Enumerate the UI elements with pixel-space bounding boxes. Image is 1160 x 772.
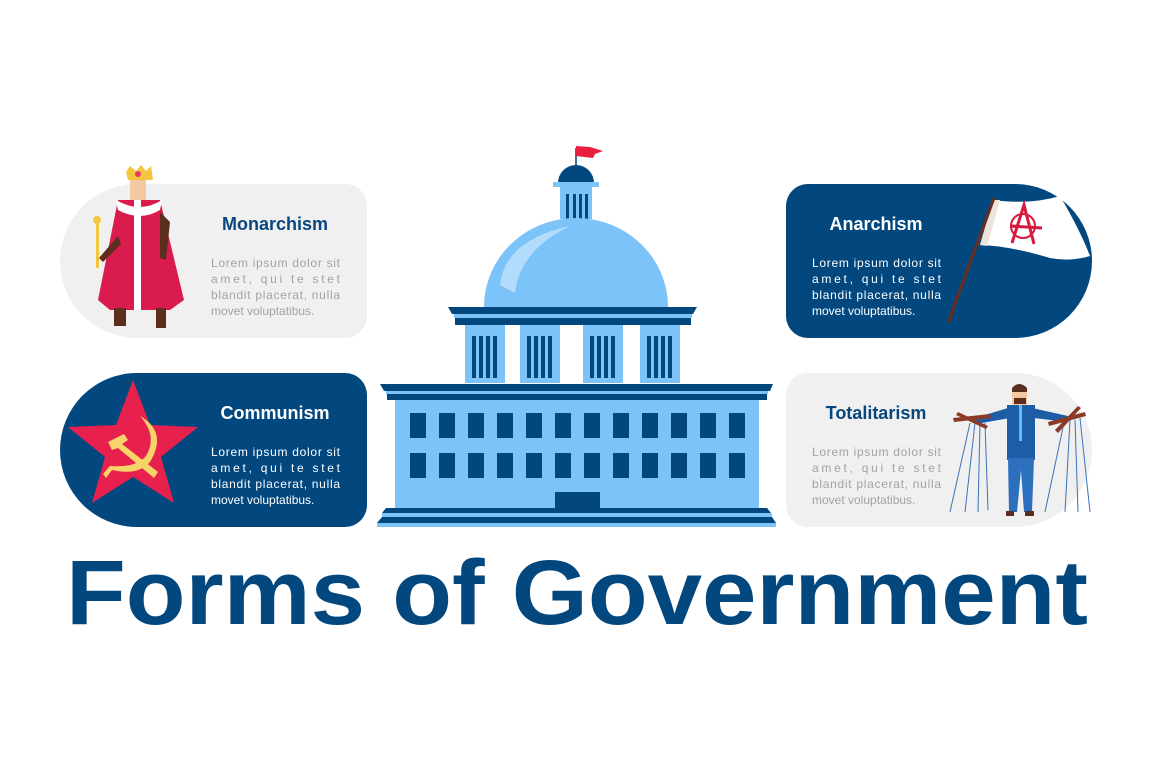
icon: anarchy flag	[948, 196, 1090, 323]
text: anarchism body: Lorem ipsum dolor sit	[812, 256, 942, 270]
text: totalitarism body: blandit placerat, nulla	[812, 477, 941, 491]
heading: totalitarism: Totalitarism	[826, 403, 926, 423]
icon: star with hammer and sickle	[68, 380, 198, 503]
text: totalitarism body: amet, qui te stet	[812, 461, 942, 475]
text: monarchism body: movet voluptatibus.	[211, 304, 314, 318]
heading: communism: Communism	[220, 403, 330, 423]
text: communism body: Lorem ipsum dolor sit	[211, 445, 341, 459]
panel: totalitarism	[786, 373, 1092, 527]
text: communism body: blandit placerat, nulla	[211, 477, 340, 491]
text: monarchism body: amet, qui te stet	[211, 272, 341, 286]
text: anarchism body: blandit placerat, nulla	[812, 288, 941, 302]
text: totalitarism body: Lorem ipsum dolor sit	[812, 445, 942, 459]
panel: anarchism	[786, 184, 1092, 338]
icon: capitol building	[377, 146, 776, 527]
icon: king	[93, 165, 184, 328]
panel: communism	[60, 373, 367, 527]
text: monarchism body: Lorem ipsum dolor sit	[211, 256, 341, 270]
text: communism body: movet voluptatibus.	[211, 493, 314, 507]
text: anarchism body: movet voluptatibus.	[812, 304, 915, 318]
text: communism body: amet, qui te stet	[211, 461, 341, 475]
icon: puppet master	[950, 384, 1090, 516]
panel: monarchism	[60, 165, 367, 338]
title: Forms of Government	[66, 542, 1088, 644]
text: monarchism body: blandit placerat, nulla	[211, 288, 340, 302]
text: totalitarism body: movet voluptatibus.	[812, 493, 915, 507]
text: anarchism body: amet, qui te stet	[812, 272, 942, 286]
heading: anarchism: Anarchism	[829, 214, 923, 234]
heading: monarchism: Monarchism	[222, 214, 328, 234]
